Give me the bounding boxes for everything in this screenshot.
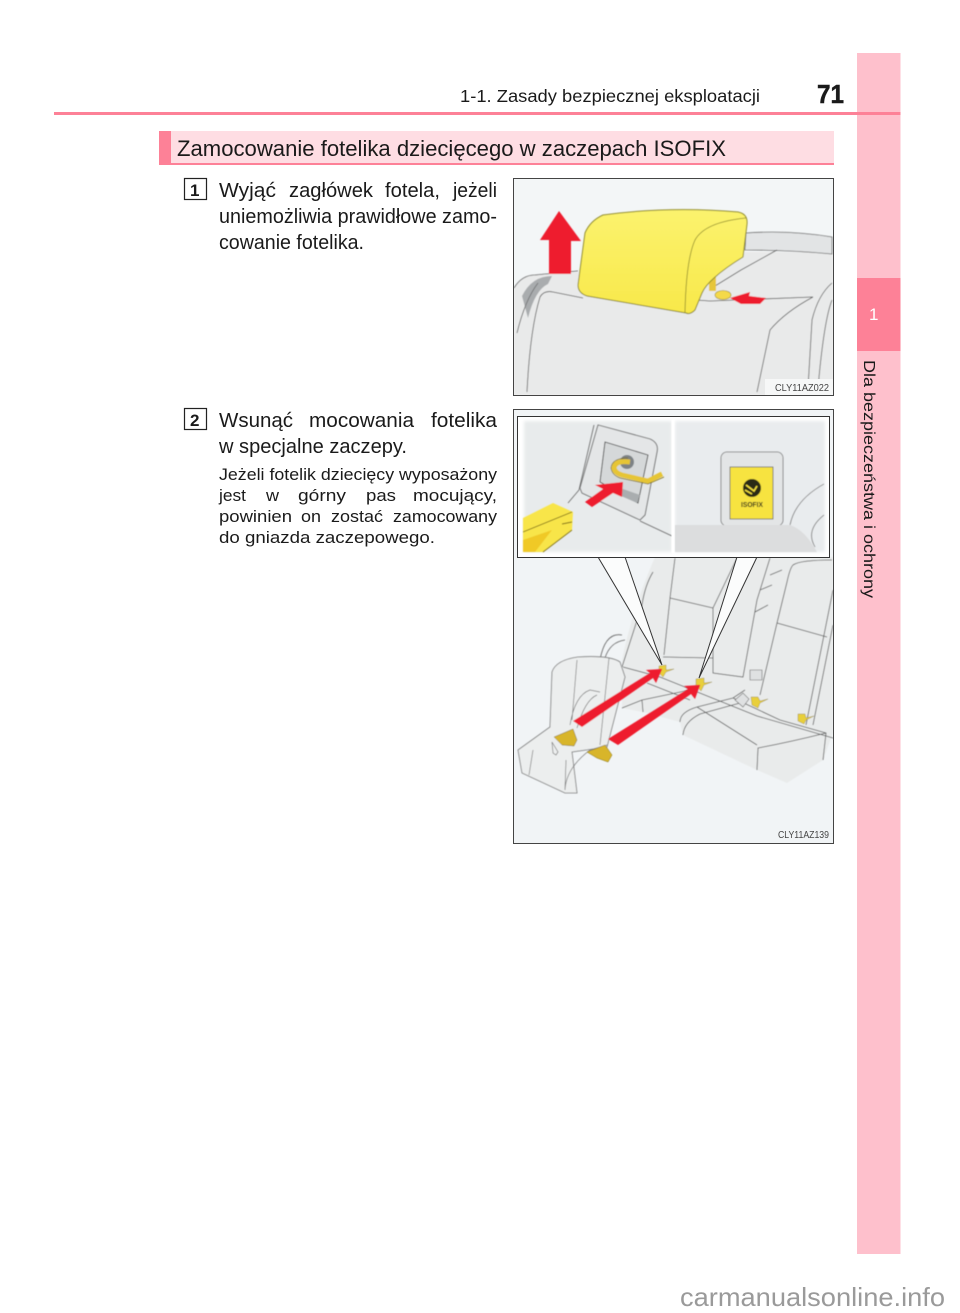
inset right: ISOFIX label: ISOFIX: [741, 502, 763, 509]
step 2 note: pas: [366, 486, 396, 505]
section heading: [159, 131, 834, 165]
page number: 71: [817, 79, 844, 109]
seat belt buckles: [735, 670, 762, 707]
page header: [460, 79, 844, 109]
step 2 note: mocujący,: [413, 486, 497, 505]
step 1 instruction: fotela,: [385, 180, 440, 202]
running title: 1-1. Zasady bezpiecznej eksploatacji: [460, 86, 760, 106]
step 2 note: jest: [218, 486, 246, 505]
step 2 text block: [184, 408, 498, 547]
step 2 note: górny: [298, 486, 347, 505]
step 1 text block: [184, 178, 497, 254]
image code: CLY11AZ022: [775, 383, 829, 394]
step 2 note: w: [265, 486, 280, 505]
inset left: anchor closeup: [523, 421, 672, 552]
sidebar: [857, 53, 900, 1254]
step 1 instruction: uniemożliwia prawidłowe zamo-: [219, 206, 497, 228]
image code: [765, 379, 833, 395]
chapter tab: [857, 278, 900, 351]
release button arrow: [730, 292, 766, 304]
step 2 instruction: [218, 410, 498, 458]
step 1 instruction: Wyjąć: [219, 180, 276, 202]
image code: CLY11AZ139: [778, 830, 829, 841]
step 2 note: Jeżeli fotelik dziecięcy wyposażony: [219, 465, 498, 484]
child seat: [518, 657, 700, 793]
arrows: [573, 669, 662, 727]
step 2 note: powinien: [219, 507, 292, 526]
headrest: [578, 210, 747, 314]
website watermark: carmanualsonline.info: [680, 1282, 945, 1312]
chapter tab: 1: [869, 305, 878, 324]
step 2 instruction: mocowania: [309, 410, 415, 432]
step 1 instruction: zagłówek: [289, 180, 374, 202]
step 2 badge: [184, 408, 206, 430]
step 2 note: zamocowany: [393, 507, 498, 526]
step 2 note: do gniazda zaczepowego.: [219, 528, 435, 547]
callout wedges: [598, 557, 757, 678]
step 2 instruction: Wsunąć: [219, 410, 293, 432]
inset right: ISOFIX label: [672, 420, 825, 553]
anchors: [659, 665, 814, 724]
step 1 badge: 1: [190, 181, 199, 200]
rear seat scene: [600, 557, 833, 783]
step 2 instruction: fotelika: [431, 410, 498, 432]
step 2 note: on: [301, 507, 321, 526]
step 2 note: zostać: [331, 507, 384, 526]
step 2 instruction: w specjalne zaczepy.: [218, 436, 407, 458]
sidebar chapter title: Dla bezpieczeństwa i ochrony: [860, 360, 877, 598]
illustration 1: headrest removal: [514, 178, 834, 396]
step 2 note: [218, 465, 498, 547]
up arrow: [540, 211, 581, 274]
illustration 2: ISOFIX attachment: [514, 410, 834, 844]
step 2 badge: 2: [190, 411, 199, 430]
step 1 instruction: jeżeli: [452, 180, 497, 202]
step 1 instruction: [219, 180, 497, 254]
section heading: Zamocowanie fotelika dziecięcego w zaczepach ISOFIX: [177, 136, 726, 161]
step 1 instruction: cowanie fotelika.: [219, 232, 364, 254]
step 1 badge: [184, 178, 206, 200]
rear seat backrest: [514, 252, 833, 395]
inset frame: [518, 416, 830, 558]
header rule: [54, 112, 900, 115]
